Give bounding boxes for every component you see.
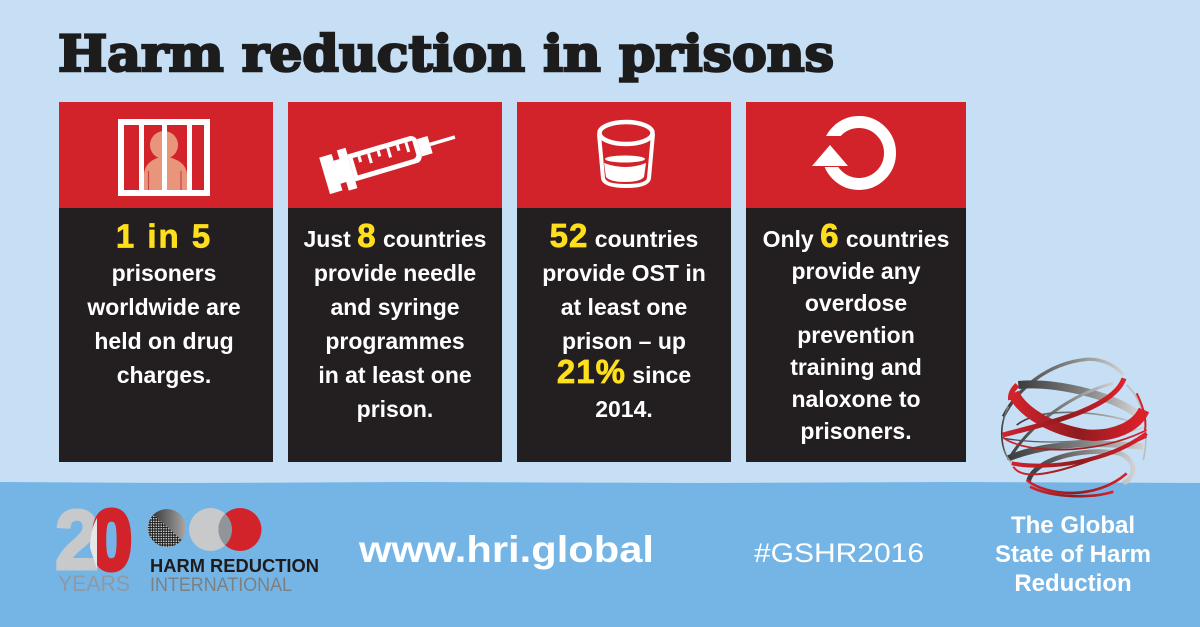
logo: Harm Reduction International: INTERNATIONAL: [150, 575, 292, 596]
caption: The Global State of Harm Reduction: State of Harm: [995, 541, 1151, 568]
panel header: red: [288, 102, 502, 209]
panel header: red: [59, 102, 273, 209]
statistic text: 52 countries: [550, 217, 698, 254]
statistic text: training and: [790, 354, 922, 380]
statistic text: Just 8 countries: [304, 217, 486, 254]
statistic text: provide any: [791, 258, 921, 284]
caption: The Global State of Harm Reduction: The Global: [1011, 512, 1135, 539]
icon: ribbon globe: [1002, 359, 1147, 496]
background: water band: [0, 482, 1200, 627]
statistic text: 21% since: [557, 353, 691, 390]
statistic text: prison.: [357, 396, 433, 422]
statistic text: in at least one: [318, 362, 472, 388]
logo: 20 years: 2: [55, 493, 99, 587]
statistic text: provide needle: [314, 260, 476, 286]
panel: overdose prevention: [746, 102, 966, 462]
statistic text: naloxone to: [791, 386, 921, 412]
panel: prisoners held on drug charges: [59, 102, 273, 462]
caption: The Global State of Harm Reduction: Reduction: [1014, 570, 1132, 597]
title: Harm reduction in prisons: [58, 24, 834, 83]
icon: glass of liquid: [599, 122, 653, 186]
icon: circular arrow: [812, 122, 890, 184]
statistic text: 1 in 5: [116, 218, 212, 254]
icon: syringe: [319, 117, 461, 196]
logo: 20 years: [55, 493, 132, 596]
logo: Harm Reduction International: [148, 508, 319, 596]
hashtag: #GSHR2016: [754, 538, 924, 568]
panel: needle and syringe programmes: [288, 102, 502, 462]
statistic text: 2014.: [595, 396, 653, 422]
panel body: black: [59, 208, 273, 462]
statistic text: prisoners: [112, 260, 216, 286]
statistic text: Only 6 countries: [763, 217, 949, 254]
statistic text: charges.: [117, 362, 211, 388]
panel body: black: [517, 208, 731, 462]
logo: 20 years: 0: [91, 493, 132, 587]
logo: 20 years: YEARS: [58, 571, 130, 596]
statistic text: at least one: [561, 294, 687, 320]
statistic text: programmes: [325, 328, 465, 354]
panel: opioid substitution therapy: [517, 102, 731, 462]
icon: prisoner behind bars: [118, 119, 210, 196]
statistic text: overdose: [805, 290, 907, 316]
statistic text: held on drug: [94, 328, 234, 354]
statistic text: and syringe: [330, 294, 460, 320]
statistic text: prevention: [797, 322, 915, 348]
statistic text: provide OST in: [542, 260, 706, 286]
panel body: black: [288, 208, 502, 462]
panel header: red: [746, 102, 966, 209]
panel body: black: [746, 208, 966, 462]
statistic text: prison – up: [562, 328, 686, 354]
statistic text: prisoners.: [800, 418, 912, 444]
statistic text: worldwide are: [86, 294, 241, 320]
panel header: red: [517, 102, 731, 209]
logo: Harm Reduction International: HARM REDUCTION: [150, 556, 319, 576]
website address: www.hri.global: [358, 529, 654, 570]
